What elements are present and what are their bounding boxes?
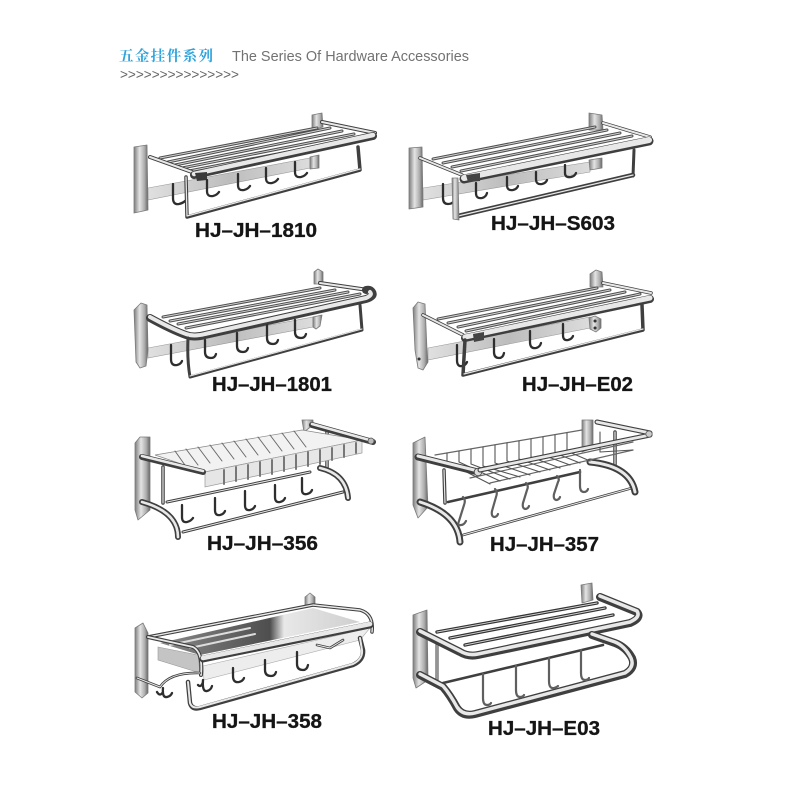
towel bar xyxy=(463,305,643,375)
chevron row: >>>>>>>>>>>>>>> xyxy=(120,67,239,82)
heading xyxy=(119,47,469,82)
hooks xyxy=(443,165,576,204)
hooks xyxy=(457,324,573,366)
wire basket xyxy=(155,430,362,487)
model label: HJ–JH–E03 xyxy=(488,718,600,740)
wall brackets and posts xyxy=(135,420,327,520)
wall brackets xyxy=(135,593,315,698)
wall brackets and back plate xyxy=(409,113,603,209)
product: HJ-JH-E02 xyxy=(413,270,651,396)
wall brackets and back plate xyxy=(413,270,603,370)
hooks xyxy=(458,470,588,525)
lower rail frame xyxy=(142,468,348,537)
hooks xyxy=(173,162,307,204)
towel bar xyxy=(452,150,634,220)
model label: HJ–JH–357 xyxy=(490,534,599,556)
hooks xyxy=(182,478,312,522)
model label: HJ–JH–356 xyxy=(207,533,318,555)
towel bar xyxy=(188,638,363,708)
product: HJ-JH-356 xyxy=(135,420,374,555)
title: Chinese: 五金挂件系列 xyxy=(119,47,213,65)
wall brackets and posts xyxy=(413,420,615,518)
arms xyxy=(418,422,652,476)
title: English: The Series Of Hardware Accessories xyxy=(232,49,469,65)
tray frame xyxy=(148,605,372,675)
lower tube and hook bar xyxy=(420,634,633,715)
model label: HJ–JH–1801 xyxy=(212,374,332,396)
model label: HJ–JH–358 xyxy=(212,711,322,733)
shelf rails and frame xyxy=(420,123,650,182)
model label: HJ–JH–S603 xyxy=(491,213,615,235)
product: HJ-JH-357 xyxy=(413,420,652,556)
tray xyxy=(158,608,370,680)
product: HJ-JH-E03 xyxy=(413,583,638,740)
shelf rails and frame xyxy=(150,122,375,181)
product: HJ-JH-S603 xyxy=(409,113,650,235)
arms xyxy=(142,424,374,472)
hooks xyxy=(157,652,308,697)
support arms xyxy=(137,640,343,687)
wall brackets and post xyxy=(413,583,593,688)
shelf rails and frame xyxy=(150,283,373,336)
model label: HJ–JH–E02 xyxy=(522,374,633,396)
model label: HJ–JH–1810 xyxy=(195,220,317,242)
wire basket xyxy=(435,430,633,484)
wall brackets and back plate xyxy=(134,113,323,213)
top shelf rails and tube xyxy=(420,596,638,656)
product: HJ-JH-1810 xyxy=(134,113,375,242)
wall brackets and back plate xyxy=(134,269,323,368)
shelf rails and frame xyxy=(423,283,651,342)
hooks xyxy=(483,650,589,705)
hooks xyxy=(171,320,306,365)
product: HJ-JH-358 xyxy=(135,593,372,733)
product: HJ-JH-1801 xyxy=(134,269,373,396)
lower rail frame xyxy=(420,462,635,542)
towel bar xyxy=(188,305,362,377)
towel bar xyxy=(186,147,360,217)
